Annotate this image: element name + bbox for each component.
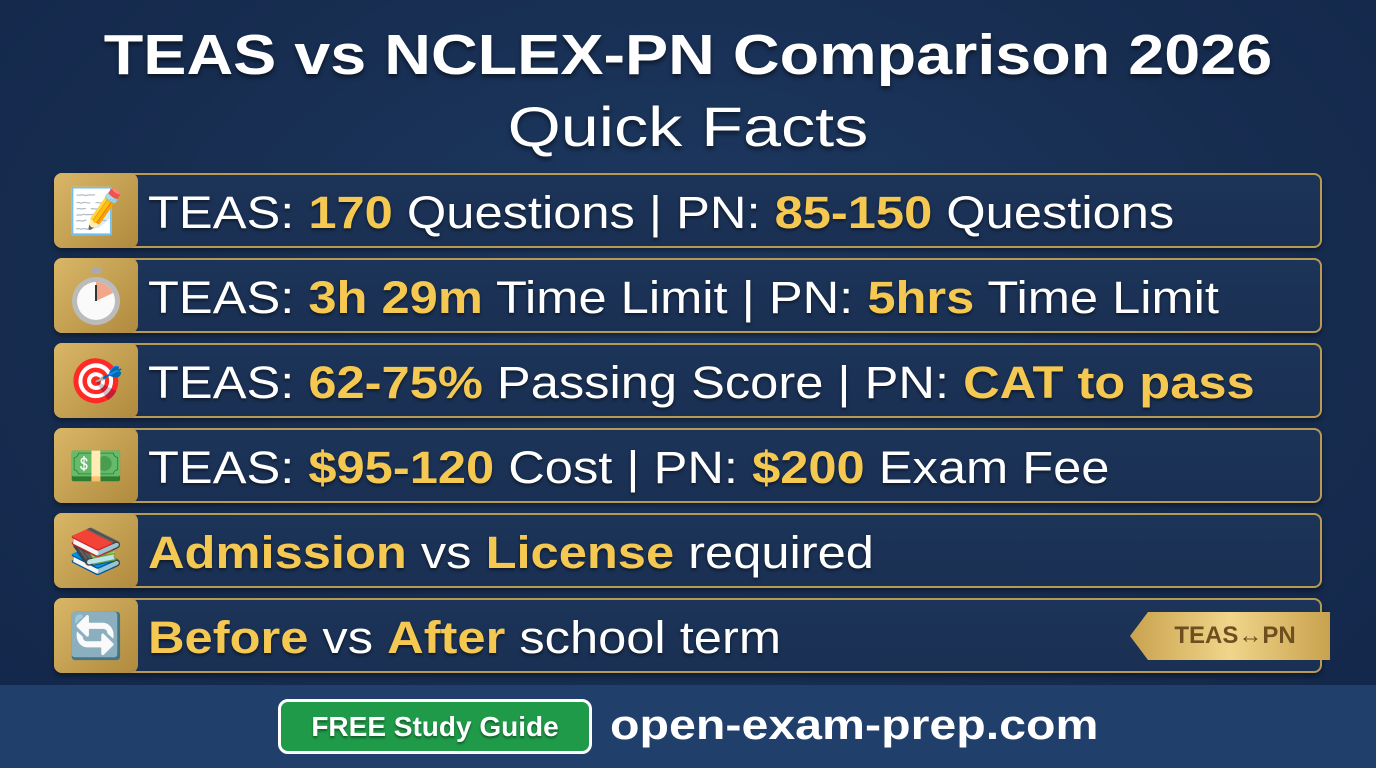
text: purpose: Admission vs License required	[148, 527, 874, 578]
button: free study guide: FREE Study Guide	[311, 710, 559, 742]
text: questions: TEAS: 170 Questions | PN: 85-150 Questions	[148, 187, 1174, 238]
icon: target	[54, 343, 138, 418]
icon: books	[54, 513, 138, 588]
icon: repeat	[54, 598, 138, 673]
text: timing: Before vs After school term	[148, 612, 781, 663]
icon: repeat: 🔄	[69, 610, 123, 662]
button: free study guide	[278, 699, 592, 754]
row: purpose	[54, 513, 1322, 588]
footer	[0, 685, 1376, 768]
icon: money: 💵	[69, 440, 123, 492]
icon: stopwatch	[54, 258, 138, 333]
title: TEAS vs NCLEX-PN Comparison 2026	[104, 23, 1272, 87]
row: cost	[54, 428, 1322, 503]
icon: target: 🎯	[69, 356, 123, 406]
icon: books: 📚	[69, 526, 123, 576]
tag: TEAS↔PN: TEAS↔PN	[1174, 622, 1296, 649]
text: passing: TEAS: 62-75% Passing Score | PN: CAT to pass	[148, 357, 1255, 408]
row: timing	[54, 598, 1322, 673]
text: time: TEAS: 3h 29m Time Limit | PN: 5hrs Time Limit	[148, 272, 1219, 323]
row: passing	[54, 343, 1322, 418]
icon: memo	[54, 173, 138, 248]
icon: money	[54, 428, 138, 503]
subtitle: Quick Facts	[508, 95, 868, 158]
url: open-exam-prep.com	[610, 701, 1098, 748]
icon: memo: 📝	[69, 186, 123, 236]
row: questions	[54, 173, 1322, 248]
row: time	[54, 258, 1322, 333]
tag: TEAS↔PN	[1130, 612, 1330, 660]
text: cost: TEAS: $95-120 Cost | PN: $200 Exam Fee	[148, 442, 1109, 493]
